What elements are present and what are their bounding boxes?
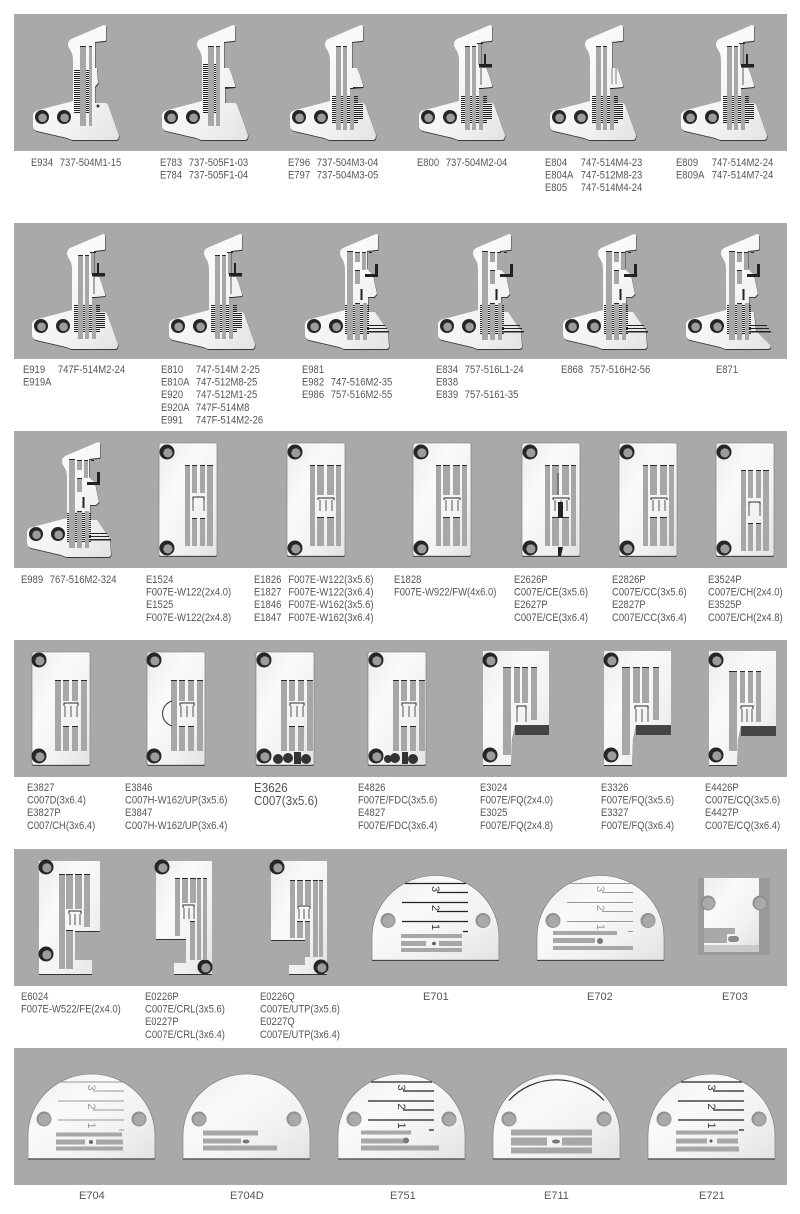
caption E3524P: C007E/CH(2x4.8): [708, 612, 783, 624]
caption E703: E703: [722, 991, 748, 1003]
caption E783: E784: [160, 170, 182, 182]
caption E0226P: E0227P: [145, 1017, 179, 1028]
caption E796: 737-504M3-05: [317, 170, 379, 182]
caption E3827: C007D(3x6.4): [27, 795, 86, 807]
panel: row 5 plates: [14, 849, 787, 1041]
caption E868: [561, 364, 651, 376]
caption E3024: F007E/FQ(2x4.0): [480, 795, 553, 807]
panel: row 6 plates: [14, 1048, 787, 1202]
caption E4826: F007E/FDC(3x5.6): [358, 795, 437, 807]
caption E804: 747-512M8-23: [581, 170, 643, 182]
caption E809: E809A: [676, 170, 704, 182]
caption E2826P: E2826P: [612, 574, 646, 586]
caption E0226P: [145, 991, 225, 1041]
caption E810: 747F-514M8: [196, 402, 250, 414]
caption E3024: F007E/FQ(2x4.8): [480, 820, 553, 832]
plate E3846: [146, 652, 205, 766]
caption E800: 737-504M2-04: [446, 157, 508, 169]
caption E934: [31, 157, 122, 169]
plate E704D: [183, 1074, 310, 1160]
plate E834: [438, 234, 524, 350]
plate E4426P: [708, 651, 776, 766]
band background row 5: [14, 849, 787, 986]
caption E989: [21, 574, 117, 586]
caption E6024: F007E-W522/FE(2x4.0): [21, 1004, 121, 1016]
plate E800: [419, 25, 506, 141]
caption E989: E989: [21, 574, 43, 586]
caption E0226Q: E0227Q: [260, 1017, 295, 1028]
plate E989: [27, 442, 112, 558]
plate E934: [33, 25, 120, 141]
caption E1828: F007E-W922/FW(4x6.0): [394, 587, 496, 599]
caption E0226Q: E0226Q: [260, 991, 295, 1003]
caption E6024: [21, 991, 121, 1016]
plate E4826: [368, 652, 426, 766]
caption E2826P: C007E/CC(3x6.4): [612, 612, 687, 624]
caption E4426P: E4426P: [705, 782, 739, 794]
caption E0226P: E0226P: [145, 991, 179, 1003]
plate E701: [372, 876, 499, 961]
caption E1524: F007E-W122(2x4.8): [146, 612, 231, 624]
caption E2626P: E2627P: [514, 600, 548, 611]
caption E3326: E3327: [601, 808, 629, 819]
caption E4426P: C007E/CQ(3x6.4): [705, 820, 780, 832]
caption E796: E797: [288, 170, 310, 182]
caption E4826: F007E/FDC(3x6.4): [358, 820, 437, 832]
caption E981: 747-516M2-35: [331, 377, 393, 389]
caption E981: [302, 364, 393, 401]
caption E0226Q: [260, 991, 340, 1041]
caption E804: E804A: [545, 170, 573, 182]
caption E1826: F007E-W162(3x5.6): [288, 600, 374, 611]
caption E919: E919: [23, 364, 45, 376]
caption E1826: F007E-W162(3x6.4): [288, 612, 374, 624]
caption E3326: F007E/FQ(3x6.4): [601, 820, 674, 832]
plate E2826: [619, 443, 677, 557]
plate E919: [32, 234, 118, 350]
caption E783: [160, 157, 248, 182]
band background row 2: [14, 223, 787, 359]
caption E1524: E1525: [146, 600, 174, 611]
panel: row 3 plates: [14, 431, 787, 624]
caption E834: E838: [436, 377, 458, 389]
caption E810: E920A: [161, 402, 189, 414]
caption E2626P: [514, 574, 588, 624]
caption E919: 747F-514M2-24: [58, 364, 125, 376]
plate E871: [686, 234, 771, 350]
caption E3024: E3024: [480, 782, 508, 794]
caption E2626P: C007E/CE(3x6.4): [514, 612, 588, 624]
caption E0226Q: C007E/UTP(3x5.6): [260, 1004, 340, 1016]
caption E2826P: C007E/CC(3x5.6): [612, 587, 687, 599]
caption E919: E919A: [23, 377, 52, 389]
caption E0226P: C007E/CRL(3x5.6): [145, 1004, 225, 1016]
caption E3626: E3626: [254, 781, 288, 795]
panel: row 4 plates: [14, 640, 787, 832]
caption E934: 737-504M1-15: [60, 157, 122, 169]
caption E796: E796: [288, 157, 310, 169]
caption E4826: [358, 782, 437, 832]
caption E0226P: C007E/CRL(3x6.4): [145, 1029, 225, 1041]
caption E2626P: C007E/CE(3x5.6): [514, 587, 588, 599]
caption E3024: [480, 782, 553, 832]
caption E3326: F007E/FQ(3x5.6): [601, 795, 674, 807]
caption E796: [288, 157, 379, 182]
caption E4426P: [705, 782, 780, 832]
plate E1826: [287, 443, 345, 557]
caption E4426P: C007E/CQ(3x5.6): [705, 795, 780, 807]
caption E702: E702: [587, 991, 613, 1003]
band background row 4: [14, 640, 787, 777]
plate E868: [563, 234, 648, 350]
caption E834: E834: [436, 364, 458, 376]
caption E1826: E1847: [254, 612, 281, 624]
caption E783: 737-505F1-03: [189, 157, 248, 169]
caption E810: 747-514M 2-25: [196, 364, 260, 376]
caption E810: 747F-514M2-26: [196, 415, 263, 427]
band background row 3: [14, 431, 787, 568]
caption E810: E810: [161, 364, 183, 376]
caption E868: 757-516H2-56: [590, 364, 651, 376]
caption E868: E868: [561, 364, 583, 376]
plate E3827: [32, 652, 90, 766]
caption E6024: E6024: [21, 991, 49, 1003]
caption E3846: E3846: [125, 782, 153, 794]
caption E3626: C007(3x5.6): [254, 794, 318, 808]
plate E0226P: [154, 860, 212, 975]
caption E701: E701: [423, 991, 449, 1003]
plate E703: [698, 878, 770, 955]
caption E934: E934: [31, 157, 53, 169]
caption E2826P: E2827P: [612, 600, 646, 611]
panel: row 1 gear plates: [14, 14, 787, 194]
plate E3024: [482, 651, 549, 766]
caption E3827: E3827: [27, 782, 55, 794]
caption E800: [417, 157, 508, 169]
caption E834: 757-5161-35: [465, 390, 519, 401]
plate E3524: [716, 443, 774, 557]
caption E3827: E3827P: [27, 808, 61, 819]
caption E804: [545, 157, 643, 194]
caption E1828: [394, 574, 496, 599]
caption E3024: E3025: [480, 808, 508, 819]
caption E704: E704: [79, 1190, 105, 1202]
panel: row 2 gear plates: [14, 223, 787, 427]
caption E804: 747-514M4-23: [581, 157, 643, 169]
caption E3827: [27, 782, 95, 832]
caption E1524: E1524: [146, 574, 174, 586]
caption E3827: C007/CH(3x6.4): [27, 820, 95, 832]
caption E804: E804: [545, 157, 567, 169]
caption E810: E991: [161, 415, 183, 427]
caption E4826: E4827: [358, 808, 386, 819]
caption E3524P: [708, 574, 783, 624]
caption E3846: C007H-W162/UP(3x5.6): [125, 795, 227, 807]
plate E1524: [159, 443, 217, 557]
plate E809: [681, 25, 768, 141]
plate E711: [493, 1074, 620, 1160]
caption E4426P: E4427P: [705, 808, 739, 819]
caption E810: E920: [161, 390, 183, 401]
caption E810: 747-512M1-25: [196, 390, 258, 401]
caption E809: 747-514M7-24: [712, 170, 774, 182]
caption E3326: E3326: [601, 782, 629, 794]
plate E0226Q: [270, 860, 328, 975]
caption E919: [23, 364, 125, 389]
plate E751: [338, 1074, 465, 1160]
plate E6024: [38, 860, 100, 975]
plate E804: [550, 25, 636, 141]
caption E1826: F007E-W122(3x5.6): [288, 574, 374, 586]
caption E809: 747-514M2-24: [712, 157, 774, 169]
caption E721: E721: [699, 1190, 725, 1202]
caption E871: E871: [716, 364, 738, 376]
plate E2626: [522, 443, 580, 557]
caption E834: E839: [436, 390, 458, 401]
plate E783: [162, 25, 248, 141]
caption E3846: C007H-W162/UP(3x6.4): [125, 820, 227, 832]
caption E809: [676, 157, 774, 182]
caption E810: E810A: [161, 377, 189, 389]
caption E2826P: [612, 574, 687, 624]
caption E0226Q: C007E/UTP(3x6.4): [260, 1029, 340, 1041]
caption E751: E751: [390, 1190, 416, 1202]
caption E3846: E3847: [125, 808, 153, 819]
caption E1828: E1828: [394, 574, 422, 586]
caption E3326: [601, 782, 674, 832]
plate E3626: [256, 652, 314, 766]
caption E810: 747-512M8-25: [196, 377, 258, 389]
caption E810: [161, 364, 263, 427]
caption E981: 757-516M2-55: [331, 390, 393, 401]
caption E1826: E1827: [254, 587, 281, 599]
plate E3326: [604, 651, 671, 766]
caption E704D: E704D: [230, 1190, 264, 1202]
caption E981: E986: [302, 390, 324, 401]
caption E3846: [125, 782, 227, 832]
caption E2626P: E2626P: [514, 574, 548, 586]
plate E796: [290, 25, 376, 141]
caption E834: [436, 364, 524, 401]
plate E704: [28, 1074, 155, 1160]
caption E1524: [146, 574, 231, 624]
caption E1826: F007E-W122(3x6.4): [288, 587, 374, 599]
plate E702: [537, 876, 664, 961]
caption E1826: E1846: [254, 600, 281, 611]
caption E4826: E4826: [358, 782, 386, 794]
caption E3524P: E3524P: [708, 574, 742, 586]
band background row 1: [14, 14, 787, 151]
caption E1826: E1826: [254, 574, 281, 586]
caption E800: E800: [417, 157, 439, 169]
caption E834: 757-516L1-24: [465, 364, 524, 376]
caption E981: E982: [302, 377, 324, 389]
caption E783: E783: [160, 157, 182, 169]
plate E721: [648, 1074, 775, 1160]
plate E810: [169, 234, 256, 350]
band background row 6: [14, 1048, 787, 1185]
caption E3524P: E3525P: [708, 600, 742, 611]
caption E809: E809: [676, 157, 698, 169]
caption E981: E981: [302, 364, 324, 376]
caption E796: 737-504M3-04: [317, 157, 379, 169]
plate E1828: [413, 443, 471, 557]
caption E3524P: C007E/CH(2x4.0): [708, 587, 783, 599]
caption E783: 737-505F1-04: [189, 170, 248, 182]
plate E981: [305, 234, 390, 350]
caption E3626: [254, 781, 318, 808]
caption E804: 747-514M4-24: [581, 183, 643, 194]
caption E804: E805: [545, 183, 567, 194]
caption E1826: [254, 574, 374, 624]
caption E711: E711: [544, 1190, 569, 1202]
caption E989: 767-516M2-324: [50, 574, 117, 586]
caption E1524: F007E-W122(2x4.0): [146, 587, 231, 599]
